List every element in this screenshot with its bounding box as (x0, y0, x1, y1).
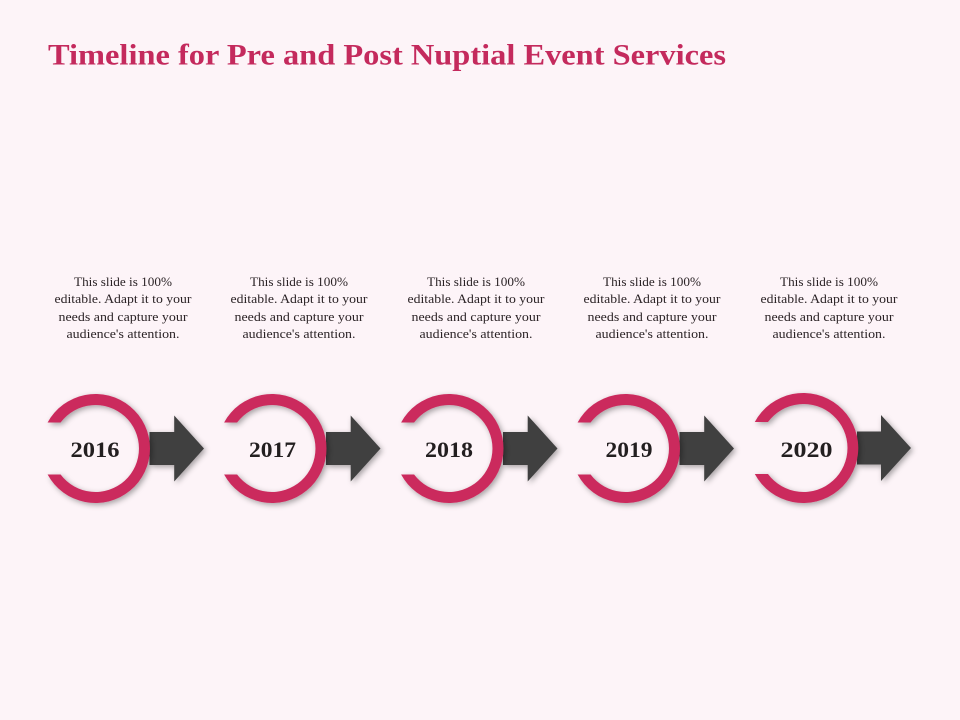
text block: 2020: audience's attention. (772, 326, 886, 341)
ring: 2020 (755, 393, 858, 503)
ring: 2017 (224, 394, 326, 503)
text block: 2016 (54, 274, 192, 341)
year: 2017: 2017 (249, 437, 296, 462)
text block: 2017: editable. Adapt it to your (230, 291, 368, 306)
arrow: 2020 (857, 415, 911, 481)
text block: 2018: needs and capture your (412, 309, 541, 324)
text block: 2017 (230, 274, 368, 341)
text block: 2019: This slide is 100% (603, 274, 701, 289)
timeline marker: 2016 (48, 394, 204, 503)
ring: 2019 (578, 394, 680, 503)
timeline marker: 2018 (401, 394, 558, 503)
year: 2016: 2016 (70, 437, 120, 462)
text block: 2018 (408, 274, 545, 341)
text block: 2019: audience's attention. (596, 326, 708, 341)
text block: 2020: needs and capture your (764, 309, 894, 324)
arrow: 2018 (503, 416, 558, 482)
arrow: 2019 (680, 416, 734, 482)
text block: 2019 (584, 274, 721, 341)
ring: 2018 (401, 394, 503, 503)
text block: 2018: audience's attention. (420, 326, 532, 341)
text block: 2020: This slide is 100% (780, 274, 878, 289)
text block: 2020 (760, 274, 898, 341)
title: Timeline for Pre and Post Nuptial Event Services (48, 38, 726, 72)
year: 2020: 2020 (780, 437, 832, 462)
arrow: 2017 (326, 416, 380, 482)
text block: 2017: audience's attention. (242, 326, 356, 341)
text block: 2016: audience's attention. (66, 326, 180, 341)
text block: 2016: needs and capture your (58, 309, 188, 324)
timeline marker: 2019 (578, 394, 734, 503)
text block: 2018: editable. Adapt it to your (408, 291, 545, 306)
text block: 2018: This slide is 100% (427, 274, 525, 289)
text block: 2019: editable. Adapt it to your (584, 291, 721, 306)
text block: 2016: This slide is 100% (74, 274, 172, 289)
text block: 2020: editable. Adapt it to your (760, 291, 898, 306)
text block: 2017: This slide is 100% (250, 274, 348, 289)
year: 2018: 2018 (425, 437, 473, 462)
text block: 2019: needs and capture your (588, 309, 717, 324)
text block: 2017: needs and capture your (234, 309, 364, 324)
text block: 2016: editable. Adapt it to your (54, 291, 192, 306)
timeline marker: 2020 (755, 393, 911, 503)
timeline marker: 2017 (224, 394, 380, 503)
year: 2019: 2019 (606, 437, 652, 462)
arrow: 2016 (150, 416, 204, 482)
ring: 2016 (48, 394, 150, 503)
